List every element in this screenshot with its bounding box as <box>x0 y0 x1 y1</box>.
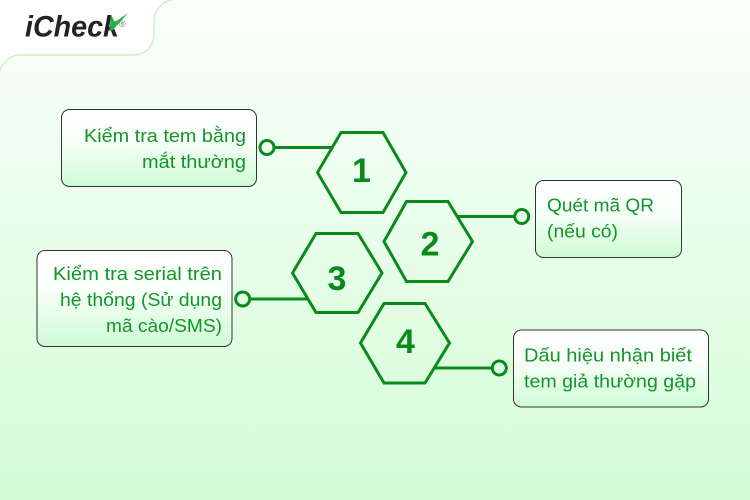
hexagon: step 3: 3 <box>328 260 346 298</box>
hexagon: step 3 <box>292 234 382 312</box>
connector: step 4 <box>435 361 506 375</box>
panel: step 4 box: tem giả thường gặp <box>524 370 696 392</box>
panel: step 3 box: hệ thống (Sử dụng <box>60 289 222 310</box>
logo: iCheck: iCheck <box>25 10 120 44</box>
panel: step 1 box: Kiểm tra tem bằng <box>84 125 246 146</box>
background panel edge <box>0 0 172 71</box>
hexagon: step 4 <box>360 304 450 383</box>
hexagon: step 2: 2 <box>421 226 439 264</box>
hexagon: step 1 <box>318 132 406 212</box>
connector: step 3 <box>236 292 308 306</box>
panel: step 2 box: Quét mã QR <box>547 194 654 216</box>
panel: step 1 box: mắt thường <box>142 151 246 172</box>
panel: step 1 box <box>62 110 256 186</box>
panel: step 3 box: mã cào/SMS) <box>106 315 222 336</box>
panel: step 2 box <box>536 180 682 258</box>
icon: logo check mark <box>110 13 128 31</box>
panel: step 3 box <box>37 250 232 346</box>
panel: step 2 box: (nếu có) <box>547 220 618 242</box>
panel: step 4 box <box>514 330 708 407</box>
hexagon: step 1: 1 <box>352 152 371 190</box>
connector: step 2 <box>457 210 529 224</box>
connector: step 1 <box>260 140 332 154</box>
logo registered mark: ® <box>119 19 126 29</box>
panel: step 4 box: Dấu hiệu nhận biết <box>524 344 692 366</box>
hexagon: step 2 <box>384 202 472 282</box>
panel: step 3 box: Kiểm tra serial trên <box>53 263 222 284</box>
hexagon: step 4: 4 <box>396 323 415 361</box>
